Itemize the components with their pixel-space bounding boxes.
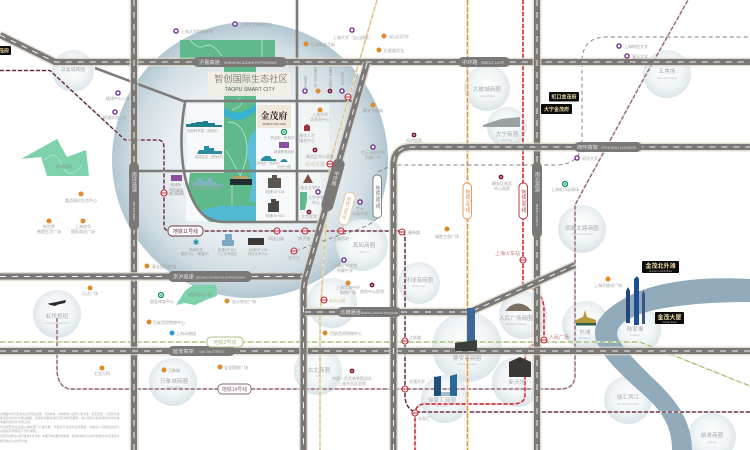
pill: south-ring vertical: OUTER RING [132,202,136,221]
district circle labels: 新天地 [509,378,526,386]
poi: SUFE: 上海财经大学 [624,43,648,49]
landmarks [48,117,645,396]
poi: high school: 世元 [356,205,364,211]
poi: Bailian: 百联西郊购物中心 [330,330,362,336]
metro line 2 [0,342,750,386]
pill: line 2 [207,337,243,347]
poi: Jing'an mall [363,102,383,113]
poi: Jinsha plaza: 金沙和光广场 [232,298,256,304]
building: ISP 602: 桃浦ISP 602 [266,213,284,218]
district circle labels: People's Square [506,322,527,326]
icon: ISP building: 商业艺术中心 [248,251,269,256]
poi: talent center: 闸华人才 [299,132,315,138]
district circle labels: Xin Tian Di [510,386,524,390]
pill: diagonal road: 中环路 [330,170,340,188]
pill: line 14: 地铁14号线 [222,386,247,393]
poi: East China Normal: 华师苑中心 [310,116,330,122]
district circle labels: Great Plaza [480,94,495,98]
poi: sports center: 国金体育中心 [150,298,174,304]
station: Wuwei East: 武威东路 [305,161,325,168]
district circle labels: Xu Jia Hui [436,404,449,408]
poi: talent center: 服务中心 [299,137,315,143]
pill: north cross: 北横通道 [340,308,361,316]
road: north cross passage [305,265,575,312]
poi: sports center [150,292,174,304]
station: West Shanghai: 上海西站 [333,235,349,241]
disclaimer text: 本图内容仅作示意之用。 [0,419,33,424]
logo: Jinmao Palace: JINMAO PALACE [262,122,286,126]
poi: Taopu education: 桃浦桥 [171,182,182,187]
poi: Tongji hospital: 同济医院 [406,137,422,143]
poi: armed police hospital: 上海市总队医院 [338,380,366,386]
station: Shanghai Railway Station [495,250,526,263]
poi: university building: 上海五大学校 [296,184,320,190]
poi: Wanda: 万达广场 [82,290,98,296]
poi: international mall: 国际商业广场 [71,228,95,234]
pill: north cross: NORTH CROSS PASSAGE [361,311,398,315]
poi: open plaza [594,276,622,288]
poi: Qibao Vanke: 七宝万科 [94,370,110,376]
poi: Putuo hospital: 普陀中心医院 [360,288,384,294]
district circle labels: 大宁商圈 [496,130,519,138]
road: middle diagonal [304,63,367,450]
poi: Jing'an district hospital: 中心医院 [494,185,510,191]
icon: Daning mall [483,117,520,127]
station: Xujiahui: 徐家汇 [418,415,430,421]
poi: Hongkou stadium: 上海虹口足球场 [551,186,579,192]
poi: MixC [162,367,180,373]
logo: Jinmao Palace: 金茂府 [260,110,288,121]
district circle labels: 五角场 [659,67,676,75]
skyline: high-end residential: 高端住区（规划中） [254,160,282,165]
district circle labels: Zhenru [360,250,369,254]
project labels black tags [0,46,684,324]
tag: Jinmao Tower [655,312,684,324]
poi: Tongji hospital [406,133,422,143]
inner site roads [95,0,355,222]
poi: Baolong plaza: 宝龙购物广场 [224,364,248,370]
district circle labels: 虹桥枢纽 [46,312,69,320]
district circle labels: Gubei [315,374,323,378]
pill: line 1: 地铁1号线 [520,189,526,213]
icon: service center: 桃浦科技 [189,247,203,252]
river: Huangpu [595,278,750,450]
station: Xujiahui [412,410,430,421]
station: Jinshajiang [288,248,300,260]
poi: Jing'an district hospital: 静安区闸北 [492,180,512,186]
metro line 3 [378,37,750,172]
logo: Jinmao Palace [257,105,291,128]
poi: Chengsheng plaza: 城胜生态广场 [435,233,459,239]
poi: Dahua hospital: 大华医院 [301,213,317,219]
station: Wuwei East [305,161,333,168]
icon: art park [217,234,238,256]
pill: Yan'an [168,346,235,356]
station: Shanghai Railway Station: 上海火车站 [495,250,520,257]
station: Caoyang Road: 曹杨路 [408,229,420,235]
poi: Jing'an mall: 静安大融城 [363,107,383,113]
pill: line 7: 地铁7号线 [464,189,470,213]
poi: Qibao Vanke [94,366,110,376]
pill: line 11: 地铁11号线 [173,228,198,235]
poi: Shanghai University [333,28,373,40]
poi: commercial street [304,41,335,47]
district circle labels: North Tibet Road [571,232,593,236]
poi: armed police hospital [332,369,372,386]
POI markers [37,21,648,386]
pill: line 14 [218,384,251,394]
icon: art park: 人工艺术园区 [217,251,238,256]
poi: international mall: 上海进华 [75,223,91,229]
road: Yan'an elevated [0,346,750,356]
pill: line 11 [168,226,203,236]
pill: west elevated [574,142,642,152]
pill: Beijing-Shanghai: BEIJING-SHANGHAI EXPRESSWAY [196,276,246,280]
poi: Jiaxi center: 嘉西绿杉生活中心 [65,197,97,203]
district circle labels: 真如商圈 [353,241,376,249]
poi: Putuo hospital [360,283,384,294]
icon: Lujiazui towers [626,276,645,325]
pill: Beijing-Shanghai: 京沪高速 [173,272,194,280]
pill: diagonal road [320,157,346,213]
road name pills [129,57,642,356]
disclaimer text: 规划信息以政府为准。 [0,438,30,443]
icon: ISP building: 桃浦ISP 136 [249,247,267,252]
pill: south-ring vertical [129,162,139,230]
station: north [345,94,351,100]
poi: Red Star: 红星美凯龙 [384,47,404,53]
poi: Shanghai University: 上海大学（宝山校区） [333,34,373,40]
station: Qilianshan: 祁连山路 [268,235,284,241]
poi: ethnic school [333,258,357,273]
pill: line 1 [519,183,528,219]
pill: north-south vertical: NORTH-SOUTH [535,204,539,226]
title: project community: TAOPU SMART CITY [225,87,276,93]
poi: Fudan: 复旦大学 [632,53,648,59]
district circle labels: Wu Jiao Chang [657,76,677,80]
district circle labels: 万象城商圈 [160,377,188,385]
icon: service center: ✱ [193,238,200,247]
district circle labels: 外滩 [579,328,591,336]
poi: open plaza: 上海开放式广场 [594,282,622,288]
pill: north-south vertical: 南北高架 [534,171,540,193]
metro line 1 [415,0,544,450]
station: Changfeng Park: 长风公园 [329,297,345,303]
poi: commercial street: 后滩商业之街 [311,41,335,47]
main site circle [112,22,388,298]
pill: middle ring: MIDDLE LOOP [481,61,505,65]
poi: west schools: 桃浦中心小学 [106,95,130,101]
pill: Yan'an: YAN' AN STREET [199,350,225,354]
pill: line 3: 地铁3号线 [374,185,380,209]
district circle labels: 人民广场商圈 [499,314,533,322]
poi: Taibao mall: 泰宝国际商城 [152,263,176,269]
icon: People's Square dome [505,304,532,311]
icon: Xujiahui towers [434,374,457,396]
poi: SUFE [617,43,648,49]
poi: Baoshan: 宝山日月光 [389,33,409,39]
district circle labels: 西藏北路商圈 [565,224,599,232]
metro line 15 [320,0,377,450]
tag: Daning Jinmao: 大宁金茂府 [544,106,569,113]
pill: Hujia [193,57,287,67]
pill: north cross [337,307,401,317]
district circle labels: 徐家汇商圈 [428,396,456,404]
poi: Dahua school: 中心 [312,199,320,205]
poi: East China Normal [310,108,330,122]
station: West Shanghai [333,228,349,241]
tag: left edge [0,46,11,55]
poi: district hospital: 闸北区中心医院 [306,153,334,159]
skyline: science park: 创新研发园（规划中） [191,186,225,190]
poi: Bailian [322,330,362,336]
poi: Red Star [376,47,404,53]
pill: line 3 [373,175,382,218]
icon: Jing'an tower [455,308,477,351]
pill: line 15 [338,191,356,226]
poi: ring mall [336,280,360,295]
tag: Hongkou Jinmao: 虹口金茂府 [551,94,577,101]
poi: Wanda [82,286,98,296]
disclaimer text: 说明图中所示区位关系及周边设施，仅供参考，具体规划以政府公布为准，若有变更，以实际为准。 [0,411,122,416]
poi: top vertical labels: 桃浦中学 [303,75,307,90]
pill: line 7 [463,183,472,219]
pill: Hujia: 沪嘉高速 [199,58,220,66]
station: Caoyang Road [399,229,420,235]
poi: Taopu education: 教育用地 [169,187,183,192]
tag: North Bund: Jinmao In North Bund [649,270,673,273]
poi: international mall [71,218,95,234]
icon: boat [230,176,252,185]
poi: Jiaxi center [65,192,97,203]
metro line 7 [466,0,469,450]
poi: green patch [300,192,307,210]
poi: Tongji: 同济大学 [582,155,598,161]
station: Jinshajiang: 金沙江 [288,254,300,260]
road: west vertical [130,0,138,450]
poi: top vertical labels: 桃浦中心医院 [328,66,332,88]
title: project community: 智创国际生态社区 [214,73,288,84]
pill: line 15: 地铁15号线 [341,195,353,220]
station: Wuwei Road: 武威路 [169,190,184,197]
pill: middle ring [458,57,510,67]
road: Hujia expressway [0,35,750,62]
poi: Chengsheng plaza [435,226,459,239]
poi: new world: 韩国生活广场 [37,228,61,234]
poi: zoo [170,330,196,336]
district circle labels: 徐汇滨江 [617,393,640,401]
station: Qilianshan [268,228,284,241]
pill: Yan'an: 延安高架 [173,347,194,355]
icon: plane [48,300,66,306]
building: ISP 136: 桃浦ISP 136 [266,189,284,194]
station: Wuwei Road [161,190,184,197]
disclaimer text: 内容如有调整恕不另行通知。 [0,428,39,433]
poi: Baian mall [146,319,185,325]
district circle labels: 陆家嘴 [627,325,644,333]
park: green south [176,285,217,305]
icon: Bund building [576,310,596,326]
district circle labels: Global port [412,284,426,288]
poi: Taopu education [169,175,183,192]
district circle labels: The Bund [579,336,592,340]
park: wetland left [21,139,89,176]
poi: Fudan [625,53,648,59]
poi: top vertical labels: 桃浦生活广场 [313,66,317,88]
district circle labels: 古北商圈 [308,366,331,374]
poi: Dahua school [308,190,324,205]
site plan: blocks and central park [180,40,329,222]
poi: new world [37,218,61,234]
station: People's Square: 人民广场 [549,334,569,341]
poi: Hongkou stadium [551,182,579,192]
poi: ethnic school: 附属中学 [337,267,353,273]
tag: North Bund [642,261,679,273]
tag: Daning Jinmao [541,104,572,114]
poi: Baolong plaza [218,364,248,370]
poi: education land: 城铁教育用地 [274,149,295,154]
poi: middle school [361,145,385,160]
disclaimer text: 项目周边规划以政府批准文件为准，本图不构成要约或承诺，项目具体情况以政府批准文件和买卖合同。 [0,433,122,438]
station: Changfeng Park [321,297,345,303]
poi: top vertical labels: 育才中学 [340,71,344,86]
poi: high school: 高级中学 [352,210,368,216]
pill: west elevated: OPEN RING ELEVATED [601,146,637,150]
pill: south-ring vertical: 南环高速 [131,171,137,193]
pill: middle ring: 中环路 [462,58,478,66]
district circle labels [45,66,724,444]
poi: university building [296,174,320,190]
poi: armed police hospital: 中国人民武装警察部队 [332,375,372,381]
station: Jiaotong University [402,378,425,392]
park: wetland left: 桃浦湿地 [56,163,72,169]
pill: west elevated: 西环高架 [577,143,598,151]
poi: central park: 中央公园 [277,164,291,169]
district circle labels: 日复城商圈 [61,66,85,73]
park: green south: 桃浦绿地公园 [188,291,212,297]
poi: new world: 新世界 [43,223,55,229]
poi: high school [352,200,368,216]
district circle labels: Lujiazui [630,333,640,337]
station: Liziyuan: 李子园 [298,235,310,241]
station: Jiangsu Road [402,334,421,344]
poi: Dahua hospital [301,210,317,219]
poi: talent center [299,124,315,143]
poi: top schools: 上海大学附属学校 [240,21,272,27]
poi: East China Normal: 上海华师 [312,111,328,117]
disclaimer text: 周边配套建设进度以相关部门公告为准，开发商不对此作任何承诺，请购房人仔细阅读合同。 [0,424,122,429]
subway stations [161,94,569,421]
station: Jiangsu Road: 江苏路 [409,334,421,340]
poi: west schools: 桃浦实验小学 [103,114,127,120]
poi: ethnic school: 上海民大学院 [333,262,357,268]
road: east vertical [532,0,542,450]
tag: Hongkou Jinmao [549,92,579,102]
poi: MixC: 万象城 [168,367,180,373]
pill: north-south vertical [532,162,542,238]
district circle labels: 前滩商圈 [701,431,724,439]
skyline: west science: 西部科学园（规划中） [187,128,221,133]
disclaimer text [0,411,122,443]
tag: Jinmao Tower: 金茂大厦 [657,314,682,322]
icon: service center [181,238,211,256]
district circle labels: 大融城商圈 [473,85,501,93]
poi: middle school: 世元高级中学 [361,149,385,155]
district circle labels: Xu Hui Riverfront [617,402,639,406]
poi: ring mall: 购物广场 [340,289,356,295]
skyline: residential: 高端住区（规划中） [195,154,225,159]
poi: business street: 商业街（规划中） [270,135,298,140]
poi: west schools [103,91,130,120]
icon: art park: 桃浦ISP 602 [218,247,236,252]
poi: Baian mall: 百安音贸购物中心 [153,319,185,325]
site plan items [169,121,298,256]
road: Beijing-Shanghai expressway [0,272,303,281]
poi: Jing'an district hospital [492,175,512,191]
district circle labels: 静安寺商圈 [453,354,481,362]
metro line 14 [57,0,688,389]
poi: middle school: 附属小学 [365,154,381,160]
poi: Dahua school: 大华中学 [308,194,324,200]
pill: Beijing-Shanghai [168,271,252,282]
pill: Hujia: SHANGHAI-JIADING EXPRESSWAY [224,61,278,65]
poi: ring mall: 上海音频中环 [336,284,360,290]
poi: Baoshan [382,33,409,39]
station: Jiaotong University: 交通大学 [409,378,425,384]
poi: top schools: 上海大学附属学校 [181,28,213,34]
icon: Shikumen [509,357,531,377]
poi: top vertical labels [303,66,344,94]
icon: service center: 服务中心（筹建中） [181,251,211,256]
poi: zoo: 上海动物园 [176,330,196,336]
tag: Jinmao Tower: Jinmao Tower [662,321,677,324]
disclaimer text: 距离及时间均为预估数据，实际情况受交通状况影响有所差异，请以现场及政府规划文件为准。 [0,415,122,420]
road: inner ring [394,147,750,450]
icon: ISP building [248,238,269,256]
district circle labels: Da Ning [502,138,512,142]
district circle labels: Hongqiao Junction [45,321,69,325]
poi: top schools [174,21,272,34]
poi: Jinsha plaza [224,298,256,304]
pill: line 2: 地铁2号线 [214,339,236,346]
poi: Tongji [575,155,598,161]
metro line 3 south branch [298,218,377,250]
station: Liziyuan [298,228,310,241]
tag: North Bund: 金茂北外滩 [645,262,676,270]
district circle labels: 环球港商圈 [405,276,433,284]
metro line pills [168,175,528,394]
metro line 11 [0,70,750,412]
district circle labels: Qiantan [707,440,717,444]
poi: Taibao mall [144,263,176,269]
station: People's Square [541,334,569,343]
district circle labels: Vanke Plaza [166,385,182,389]
title: project community [208,72,290,96]
poi: district hospital [306,148,334,159]
district circle labels: Jing'An Temple [458,362,477,366]
